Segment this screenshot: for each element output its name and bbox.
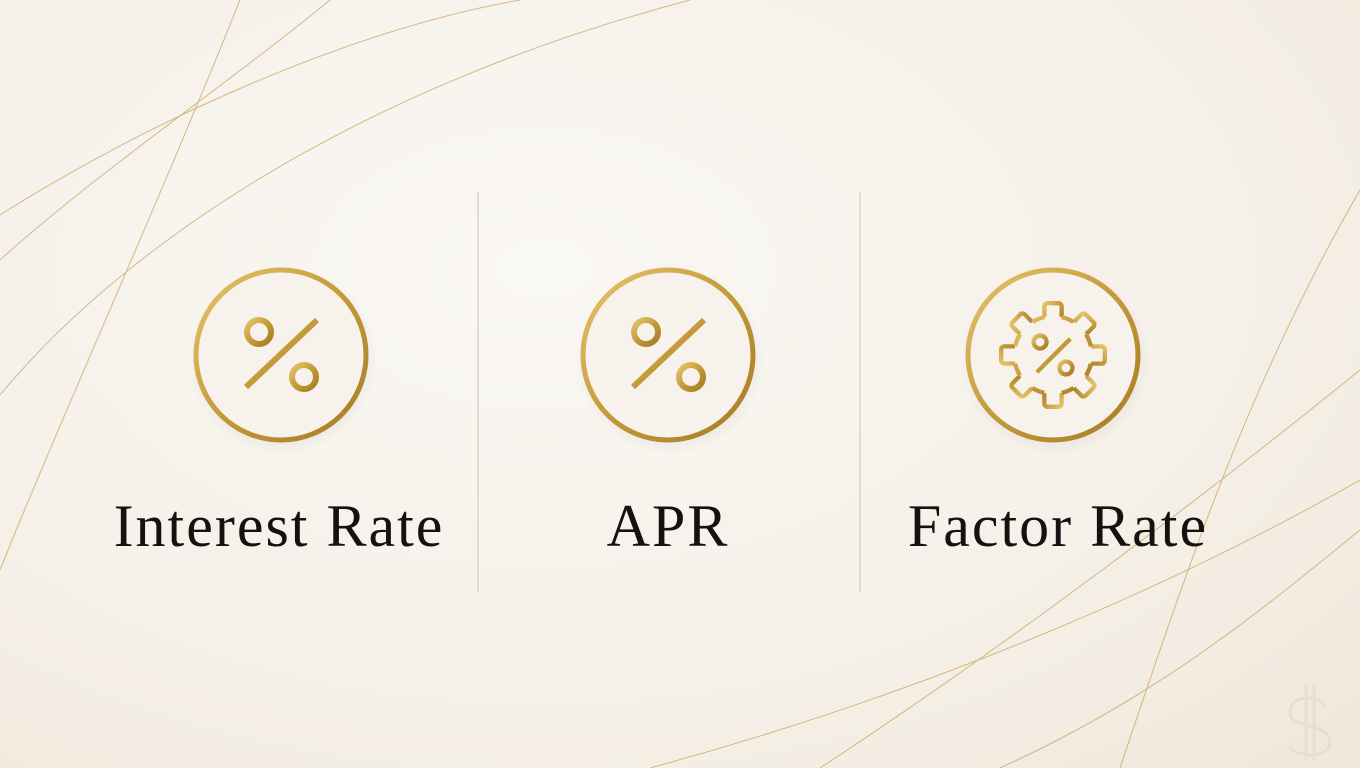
dividers	[478, 192, 860, 592]
icon: factor rate gear	[960, 265, 1150, 455]
label: Factor Rate: Factor Rate	[908, 493, 1208, 559]
label: Interest Rate: Interest Rate	[114, 493, 444, 559]
logo: dollar watermark	[1290, 685, 1330, 760]
icon: interest rate	[188, 265, 378, 455]
label: APR: APR	[607, 493, 729, 559]
icon: APR	[575, 265, 765, 455]
